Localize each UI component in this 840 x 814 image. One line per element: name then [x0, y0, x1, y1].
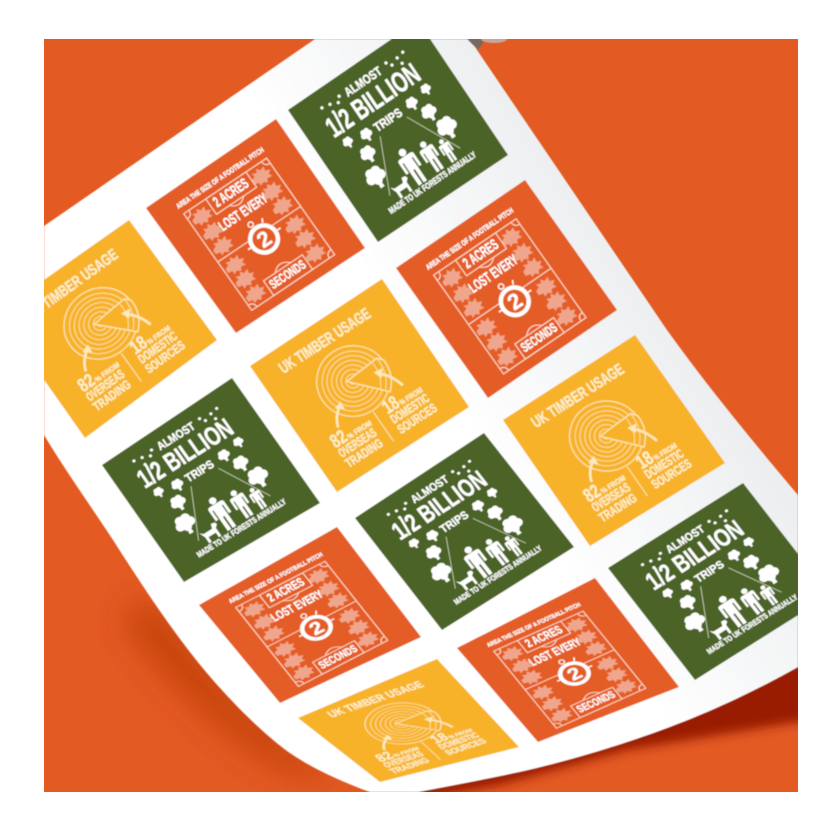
card: half billion trips right: MADE TO UK FORESTS ANNUALLY: [705, 592, 800, 656]
card: football pitch bottom centre: 2: [563, 664, 587, 685]
card: football pitch top: SECONDS: [266, 257, 309, 292]
card: half billion trips right: ALMOST: [663, 522, 708, 556]
card: timber usage centre: % FROM: [398, 386, 424, 407]
card: timber usage centre: DOMESTIC: [387, 390, 432, 426]
card: timber usage right: UK TIMBER USAGE: [528, 361, 628, 432]
card: timber usage right: % FROM: [599, 474, 627, 496]
card: football pitch lower left: 2 ACRES: [263, 575, 307, 604]
card: football pitch lower left: 2: [305, 618, 329, 639]
card: timber usage centre: UK TIMBER USAGE: [276, 305, 374, 377]
card: half billion trips top: 1/2 BILLION: [320, 58, 426, 144]
card: timber usage left: % FROM: [93, 360, 121, 384]
card: timber usage centre: OVERSEAS: [335, 425, 379, 460]
card: half billion trips top: ALMOST: [342, 64, 385, 100]
card: football pitch lower left: SECONDS: [316, 643, 360, 671]
card: timber usage right: OVERSEAS: [589, 480, 633, 515]
card: football pitch upper right: 2: [503, 288, 527, 315]
card: timber usage right: DOMESTIC: [641, 446, 687, 482]
card: football pitch top: LOST EVERY: [216, 191, 271, 235]
card: timber usage bottom: 18: [427, 731, 452, 746]
card: timber usage bottom: OVERSEAS: [381, 750, 426, 770]
card: timber usage right: 18: [632, 447, 658, 474]
card: football pitch top: AREA THE SIZE OF A FOOTBALL PITCH: [174, 145, 266, 211]
card: timber usage bottom: SOURCES: [443, 737, 489, 757]
card: football pitch upper right: LOST EVERY: [466, 251, 521, 297]
paper shadow lower right: [414, 656, 798, 792]
card: timber usage bottom: DOMESTIC: [436, 731, 482, 751]
card: half billion trips left: TRIPS: [182, 457, 217, 485]
card: timber usage bottom: [298, 659, 519, 782]
paper shadow lower left: [125, 600, 350, 785]
card: timber usage centre: SOURCES: [394, 400, 440, 437]
card: timber usage bottom: UK TIMBER USAGE: [324, 679, 427, 719]
card: timber usage bottom: % FROM: [447, 728, 474, 740]
card: half billion trips top: TRIPS: [371, 106, 405, 135]
card: timber usage right: [503, 335, 725, 546]
card: timber usage left: 18: [126, 332, 151, 359]
card: football pitch upper right: [396, 180, 617, 398]
card: timber usage left: 82: [74, 370, 99, 397]
card: football pitch top: [146, 119, 365, 333]
card: timber usage bottom: 82: [372, 749, 397, 765]
card: timber usage left: DOMESTIC: [135, 328, 180, 366]
card: football pitch top: 2 ACRES: [211, 176, 252, 211]
card: timber usage left: [44, 220, 218, 438]
card: timber usage centre: [250, 279, 469, 492]
card: half billion trips right: TRIPS: [692, 558, 727, 585]
card: half billion trips right: [608, 482, 798, 680]
card: football pitch bottom centre: SECONDS: [574, 689, 618, 715]
card: timber usage right: SOURCES: [648, 456, 694, 492]
card: timber usage left: UK TIMBER USAGE: [23, 246, 121, 324]
card: timber usage bottom: % FROM: [392, 746, 421, 759]
card: football pitch top: 2: [252, 226, 276, 253]
card: football pitch bottom centre: LOST EVERY: [526, 635, 584, 668]
card: half billion trips top: MADE TO UK FORESTS ANNUALLY: [387, 149, 478, 216]
card: half billion trips centre: [355, 433, 574, 630]
card: timber usage left: SOURCES: [142, 338, 188, 376]
card: football pitch upper right: SECONDS: [518, 320, 560, 355]
card: half billion trips left: MADE TO UK FORESTS ANNUALLY: [195, 497, 288, 559]
card: half billion trips left: ALMOST: [154, 419, 198, 453]
card: football pitch lower left: LOST EVERY: [267, 587, 326, 624]
card: timber usage left: OVERSEAS: [83, 367, 127, 404]
card: timber usage centre: % FROM: [345, 419, 374, 441]
card: half billion trips centre: TRIPS: [437, 508, 471, 536]
card: timber usage right: 82: [579, 481, 605, 507]
card: timber usage left: TRADING: [90, 377, 134, 414]
card: football pitch lower left: [199, 527, 421, 703]
card: half billion trips centre: MADE TO UK FORESTS ANNUALLY: [452, 543, 544, 606]
card: football pitch bottom centre: [457, 578, 679, 742]
card: timber usage right: % FROM: [652, 441, 679, 462]
paper fold behind top: [467, 39, 486, 50]
card: half billion trips right: 1/2 BILLION: [639, 514, 749, 595]
card: football pitch upper right: 2 ACRES: [460, 236, 502, 272]
card: half billion trips centre: ALMOST: [408, 472, 452, 506]
card: timber usage centre: TRADING: [342, 436, 386, 471]
card: football pitch lower left: AREA THE SIZE OF A FOOTBALL PITCH: [228, 552, 325, 605]
card: football pitch upper right: AREA THE SIZE OF A FOOTBALL PITCH: [424, 206, 515, 272]
card: half billion trips left: 1/2 BILLION: [131, 413, 239, 494]
card: half billion trips centre: 1/2 BILLION: [386, 466, 492, 545]
card: timber usage left: % FROM: [145, 324, 172, 346]
card: timber usage bottom: TRADING: [388, 756, 432, 776]
tan object at top edge: [480, 39, 508, 44]
card: timber usage centre: 82: [326, 426, 352, 453]
card: timber usage centre: 18: [378, 392, 404, 419]
card: half billion trips top: [288, 21, 508, 242]
card: timber usage right: TRADING: [596, 490, 640, 525]
card: half billion trips left: [102, 378, 320, 582]
card: football pitch bottom centre: AREA THE SIZE OF A FOOTBALL PITCH: [486, 602, 583, 649]
card: football pitch bottom centre: 2 ACRES: [522, 623, 565, 650]
